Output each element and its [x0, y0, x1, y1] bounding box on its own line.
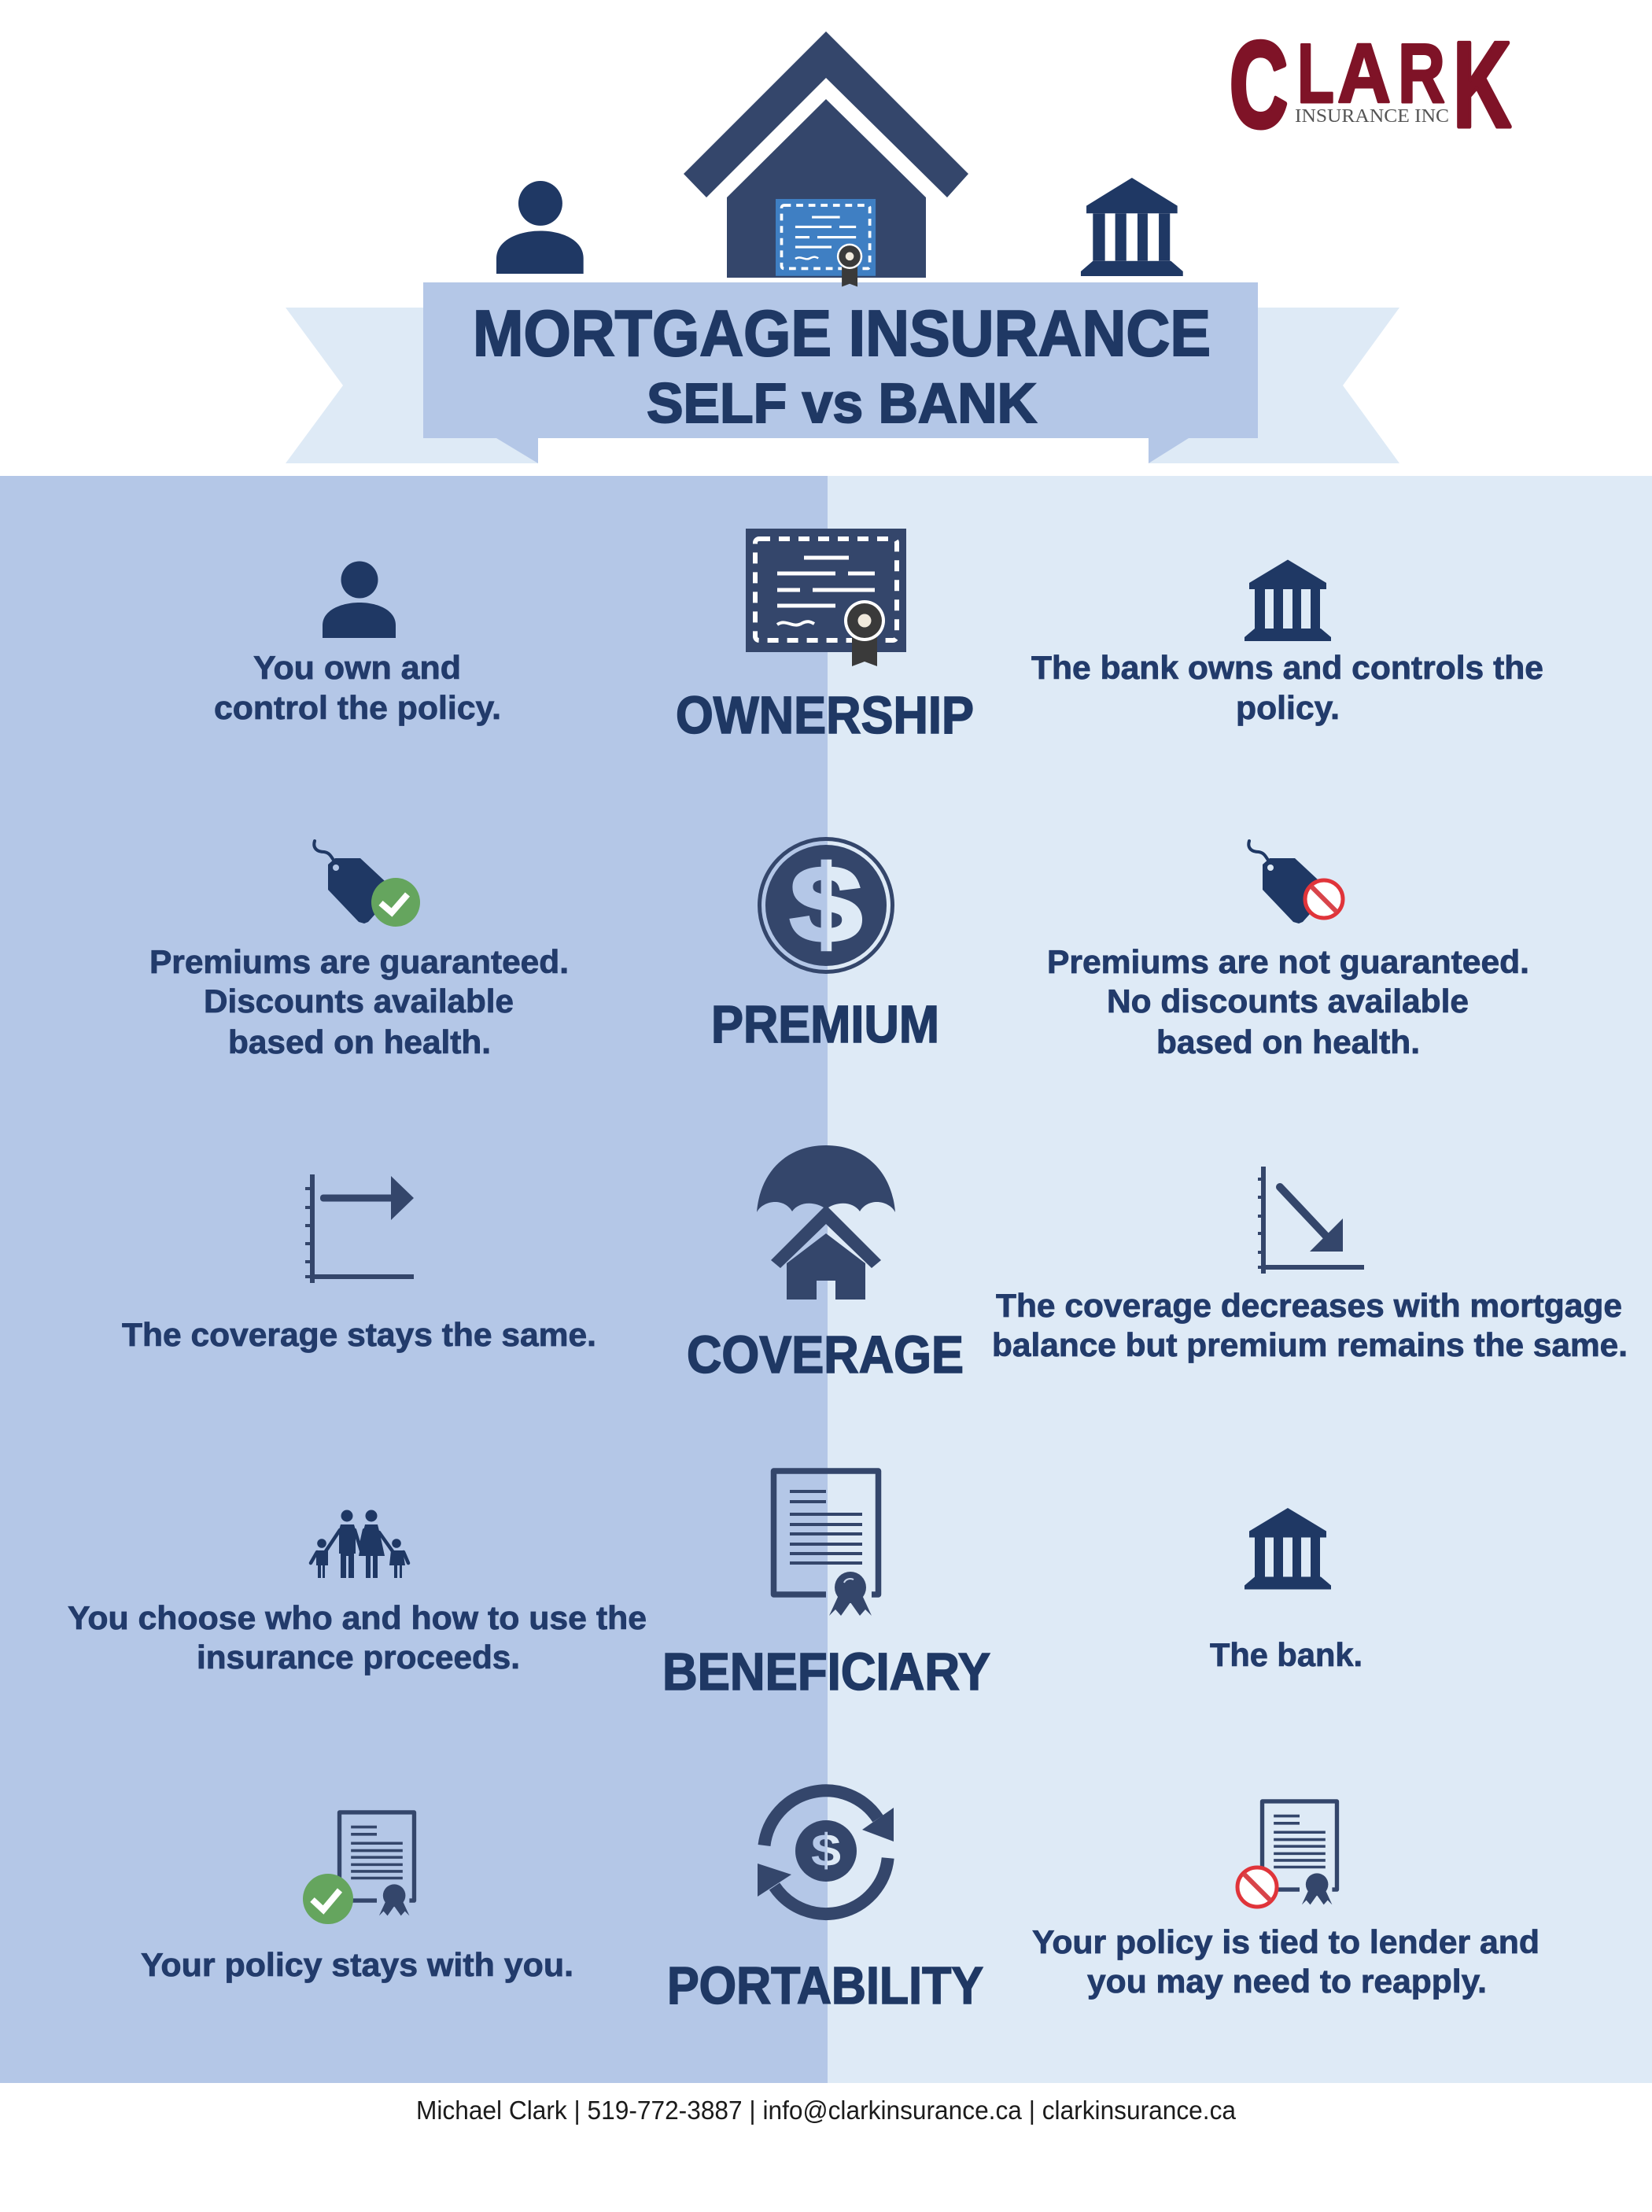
- icon: policy document: [774, 1471, 878, 1616]
- text: bank premium: based on health.: [1156, 1023, 1420, 1060]
- text: self ownership: [214, 649, 501, 726]
- banner left tail: [286, 308, 538, 463]
- heading: beneficiary: BENEFICIARY: [662, 1642, 990, 1701]
- house body: [727, 99, 926, 278]
- icon: circular arrows with dollar: $: [811, 1825, 841, 1876]
- text: self coverage: The coverage stays the same.: [122, 1316, 596, 1353]
- logo: Clark Insurance Inc: K: [1453, 17, 1511, 153]
- text: bank beneficiary: The bank.: [1210, 1636, 1363, 1673]
- icon: person: [323, 562, 396, 638]
- text: bank portability: Your policy is tied to lender and: [1032, 1923, 1540, 1960]
- house roof: [684, 31, 968, 197]
- icon: family: [311, 1510, 408, 1578]
- text: bank premium: Premiums are not guaranteed.: [1047, 943, 1529, 980]
- text: bank premium: [1047, 943, 1529, 1060]
- icon: header house with certificate: [684, 31, 968, 286]
- footer: contact details: Michael Clark | 519-772-3887 | info@clarkinsurance.ca | clarkinsurance.ca: [416, 2096, 1237, 2125]
- icon: umbrella over house: [757, 1145, 895, 1300]
- text: bank coverage: [992, 1287, 1628, 1363]
- text: bank ownership: [1031, 649, 1543, 726]
- heading: ownership: OWNERSHIP: [676, 686, 974, 745]
- text: bank ownership: The bank owns and controls the: [1031, 649, 1543, 686]
- row: portability: [141, 1790, 1540, 2015]
- banner right tail: [1149, 308, 1399, 463]
- heading: premium: PREMIUM: [711, 995, 939, 1054]
- text: self ownership: control the policy.: [214, 689, 501, 726]
- icon: header bank: [1081, 178, 1183, 276]
- banner main: [423, 282, 1258, 438]
- icon: policy document with prohibition sign: [1237, 1801, 1337, 1907]
- icon: price tag with check: [314, 841, 420, 927]
- text: self premium: Premiums are guaranteed.: [149, 943, 569, 980]
- text: bank premium: No discounts available: [1107, 982, 1469, 1019]
- text: bank coverage: balance but premium remains the same.: [992, 1326, 1628, 1363]
- text: bank portability: [1032, 1923, 1540, 2000]
- logo: Clark Insurance Inc: INSURANCE INC: [1295, 106, 1449, 127]
- text: self premium: [149, 943, 569, 1060]
- panel: right column background (bank): [828, 476, 1652, 2083]
- icon: declining coverage chart: [1258, 1167, 1364, 1274]
- logo: Clark Insurance Inc: L: [1297, 26, 1334, 120]
- icon: flat coverage chart: [305, 1174, 414, 1283]
- icon: dollar coin: [760, 839, 892, 972]
- banner left fold: [496, 438, 538, 463]
- panel: left column background (self): [0, 476, 828, 2083]
- text: self beneficiary: [68, 1599, 647, 1676]
- title: main: MORTGAGE INSURANCE: [473, 297, 1211, 370]
- heading: coverage: COVERAGE: [687, 1325, 964, 1384]
- certificate in house: [776, 199, 876, 286]
- text: bank ownership: policy.: [1236, 689, 1340, 726]
- heading: portability: PORTABILITY: [667, 1956, 983, 2015]
- icon: certificate: [746, 529, 906, 666]
- row: coverage: [122, 1145, 1628, 1384]
- row: ownership: [214, 529, 1543, 745]
- row: beneficiary: [68, 1471, 1363, 1701]
- title: subtitle: SELF vs BANK: [647, 373, 1037, 435]
- text: self premium: based on health.: [228, 1023, 491, 1060]
- text: self premium: Discounts available: [204, 982, 514, 1019]
- text: self beneficiary: You choose who and how to use the: [68, 1599, 647, 1636]
- logo: Clark Insurance Inc: R: [1398, 26, 1445, 120]
- icon: price tag with prohibition sign: [1248, 841, 1343, 924]
- row: premium: [149, 839, 1529, 1060]
- logo: Clark Insurance Inc: A: [1337, 26, 1391, 120]
- icon: policy document with check: [303, 1812, 414, 1924]
- text: self portability: Your policy stays with you.: [141, 1946, 573, 1983]
- text: self beneficiary: insurance proceeds.: [197, 1639, 520, 1676]
- logo: Clark Insurance Inc: C: [1230, 17, 1288, 153]
- title banner: [286, 282, 1399, 463]
- banner right fold: [1149, 438, 1189, 463]
- logo: Clark Insurance Inc: [1230, 17, 1511, 153]
- text: self ownership: You own and: [253, 649, 461, 686]
- icon: bank: [1245, 560, 1331, 641]
- icon: circular arrows with dollar: [758, 1790, 894, 1914]
- text: bank coverage: The coverage decreases with mortgage: [996, 1287, 1622, 1324]
- icon: bank: [1245, 1508, 1331, 1589]
- icon: header person: [496, 181, 584, 274]
- icon: dollar coin: $: [790, 844, 862, 965]
- text: bank portability: you may need to reapply.: [1087, 1963, 1487, 2000]
